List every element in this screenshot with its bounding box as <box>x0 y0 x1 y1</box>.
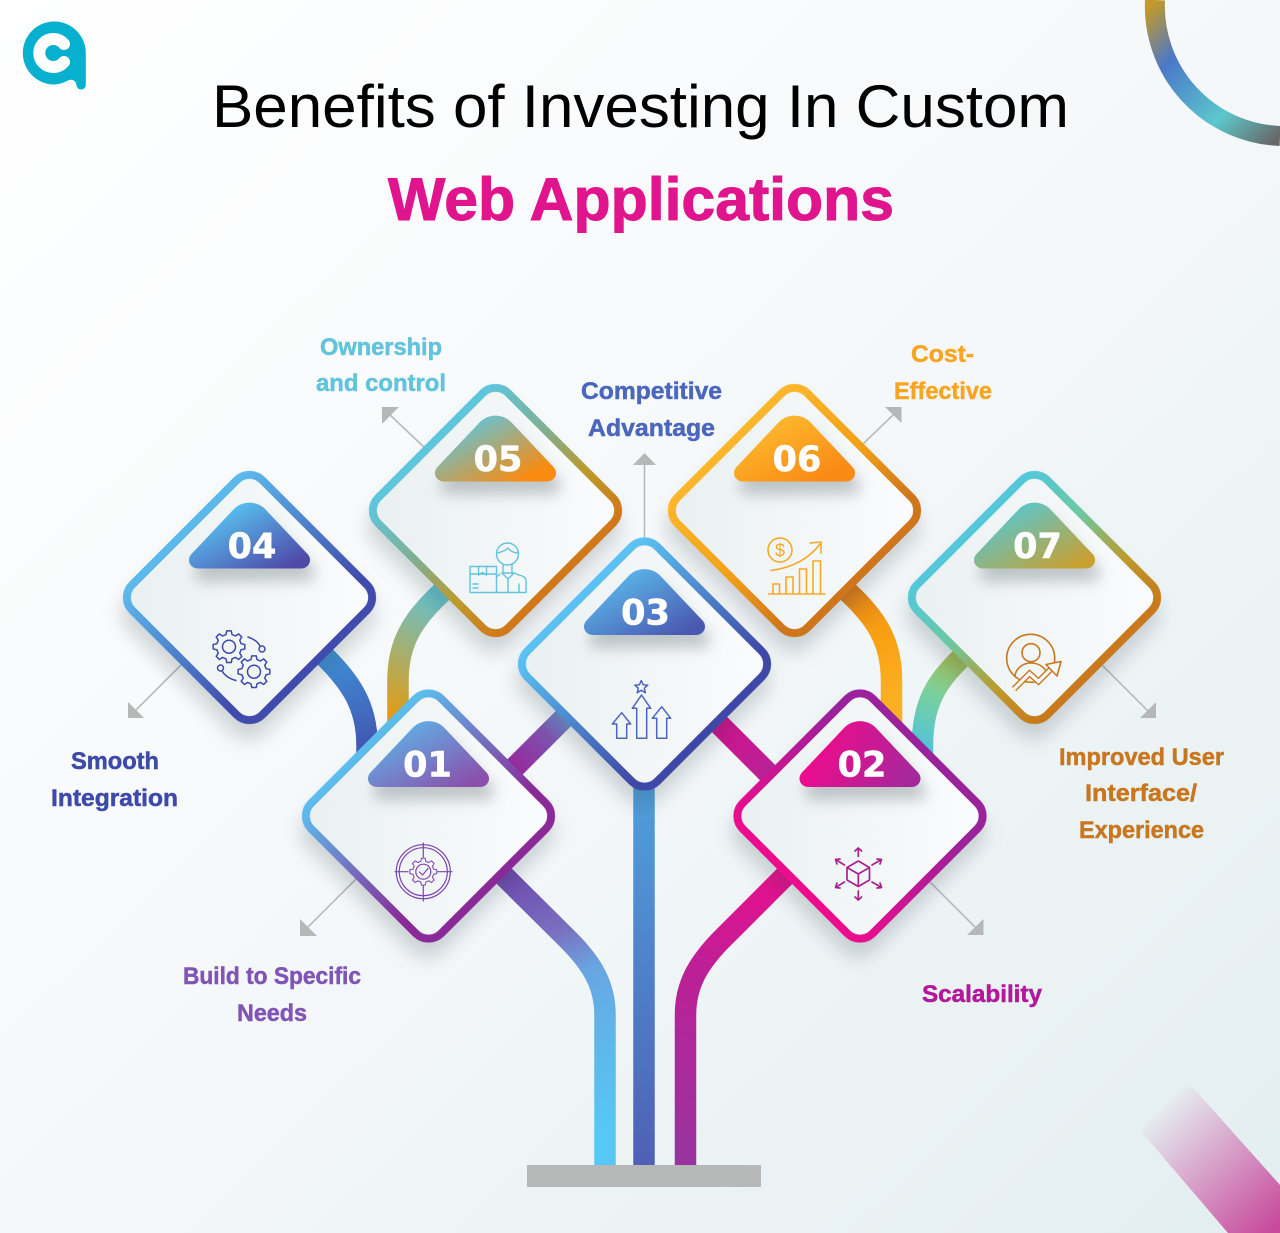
label: improved user interface/experience: Interface/ <box>1085 780 1197 807</box>
label: improved user interface/experience: Experience <box>1079 817 1204 844</box>
decorative arc top right <box>1155 0 1280 136</box>
arrow: cost-effective <box>863 407 902 444</box>
decorative pink band bottom right <box>1140 1082 1280 1233</box>
label: cost-effective <box>894 341 992 405</box>
label: smooth integration: Smooth <box>71 748 159 775</box>
label: build to specific needs <box>183 963 361 1027</box>
label: improved user interface/experience <box>1059 744 1224 844</box>
label: scalability: Scalability <box>922 981 1043 1008</box>
label: competitive advantage <box>581 378 722 442</box>
card 01 <box>298 686 559 946</box>
label: competitive advantage: Competitive <box>581 378 722 405</box>
title: Benefits of Investing In Custom <box>212 73 1069 140</box>
card 03 <box>514 534 775 794</box>
badge 05 <box>435 416 556 482</box>
label: build to specific needs: Build to Specific <box>183 963 361 990</box>
label: cost-effective: Cost- <box>911 341 974 368</box>
badge 01 <box>368 721 489 787</box>
label: improved user interface/experience: Improved User <box>1059 744 1224 771</box>
arrow: build to specific needs <box>300 873 362 936</box>
badge 06 <box>734 416 855 482</box>
badge 03: 03 <box>621 594 670 634</box>
label: ownership and control <box>316 334 446 397</box>
label: ownership and control: and control <box>316 370 446 397</box>
arrow: competitive advantage <box>633 453 656 540</box>
label: smooth integration <box>51 748 178 812</box>
card 02 <box>730 686 990 946</box>
icon: target gear <box>395 843 452 901</box>
card 04 <box>119 467 380 728</box>
badge 02: 02 <box>838 746 886 786</box>
badge 04: 04 <box>228 527 276 567</box>
icon: revenue growth <box>768 538 825 594</box>
badge 06: 06 <box>773 440 821 480</box>
badge 03 <box>584 569 705 635</box>
label: smooth integration: Integration <box>51 785 178 812</box>
logo <box>23 22 86 90</box>
icon: user growth <box>1007 634 1061 689</box>
card 07 <box>904 467 1165 728</box>
arrow: scalability <box>929 881 984 935</box>
icon: rising arrows with star <box>612 680 671 738</box>
badge 01: 01 <box>403 746 452 786</box>
badge 04 <box>189 503 310 568</box>
trunk base <box>527 1165 761 1187</box>
card 05 <box>365 380 626 641</box>
card 06 <box>664 380 925 641</box>
icon: delivery person with box <box>470 543 526 592</box>
icon: revenue growth: $ <box>775 540 785 560</box>
label: build to specific needs: Needs <box>237 1000 307 1027</box>
arrow: ownership <box>382 407 426 449</box>
icon: expanding cube <box>836 848 882 900</box>
arrow: improved UI <box>1101 664 1156 718</box>
label: cost-effective: Effective <box>894 378 992 405</box>
badge 02 <box>799 721 921 787</box>
label: ownership and control: Ownership <box>320 334 442 361</box>
icon: gears <box>213 631 270 688</box>
badge 07 <box>974 503 1095 568</box>
tree trunk and branches <box>318 583 970 1166</box>
label: competitive advantage: Advantage <box>588 415 715 442</box>
badge 07: 07 <box>1013 527 1062 567</box>
arrow: smooth integration <box>128 665 181 718</box>
subtitle: Web Applications <box>388 166 894 233</box>
badge 05: 05 <box>474 440 522 480</box>
